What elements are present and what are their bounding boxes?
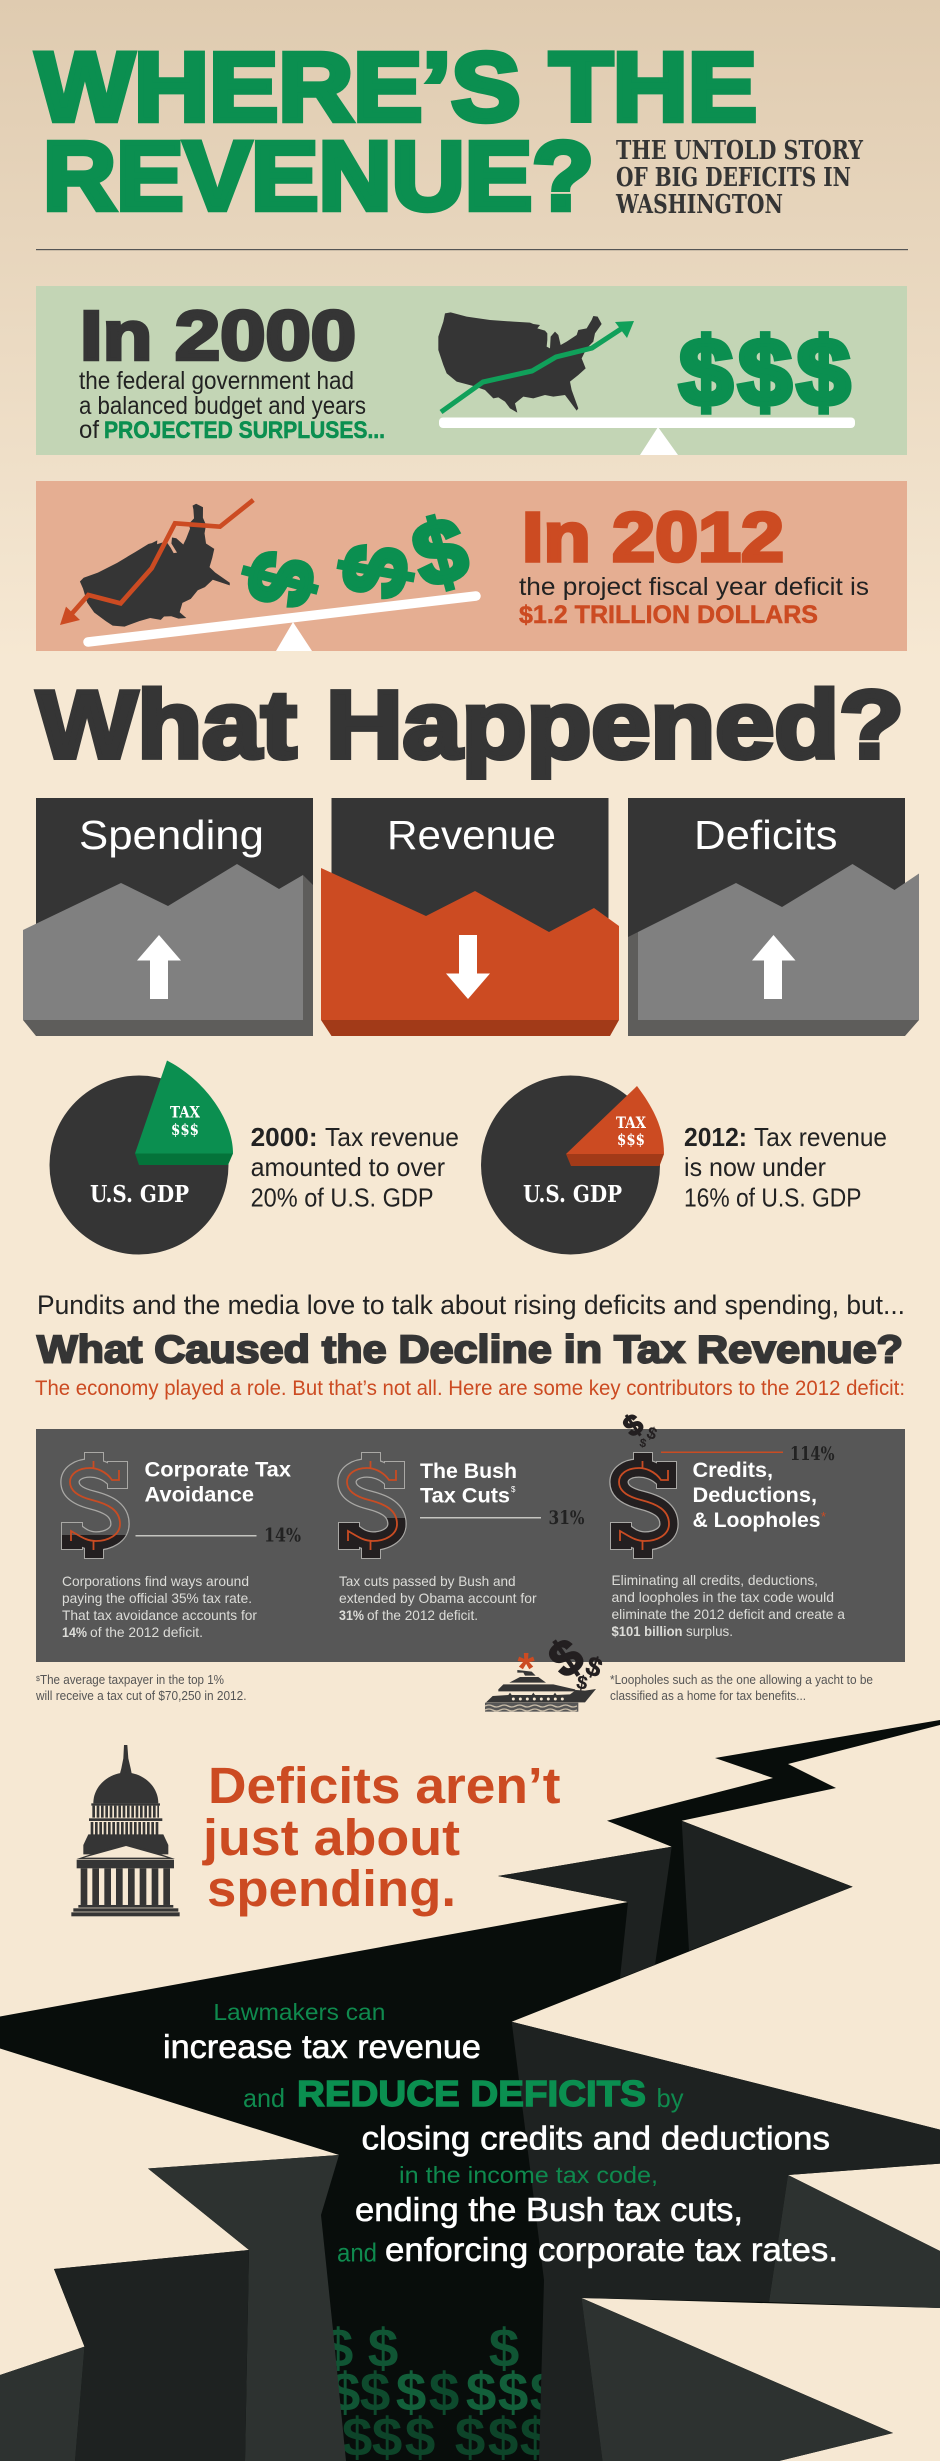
dollars in the crack: $ bbox=[498, 2361, 528, 2423]
panel: deficits bbox=[628, 798, 919, 1036]
column: credits deductions loopholes: 114% bbox=[790, 1443, 834, 1465]
dollar signs: $ bbox=[797, 319, 850, 426]
text: lawmakers call to action bbox=[163, 1999, 838, 2268]
icon: US map bbox=[438, 312, 602, 413]
column: corporate tax avoidance bbox=[61, 1452, 301, 1640]
text: 2000 tax revenue: Tax revenue bbox=[325, 1122, 459, 1152]
icon: dollar 14 percent bbox=[61, 1452, 128, 1559]
column: bush tax cuts: of the 2012 deficit. bbox=[367, 1607, 478, 1623]
icon: dollars from the yacht: $ bbox=[582, 1650, 606, 1684]
text: balanced budget bbox=[79, 367, 385, 444]
column: credits deductions loopholes bbox=[610, 1443, 845, 1639]
pie chart: 2012: TAX bbox=[616, 1113, 646, 1132]
icon: dollar 31 percent bbox=[338, 1452, 405, 1559]
icon: yacht bbox=[485, 1627, 606, 1712]
text: 2012 tax revenue: Tax revenue bbox=[754, 1122, 887, 1152]
column: credits deductions loopholes: eliminate the 2012 deficit and create a bbox=[612, 1606, 845, 1622]
text: balanced budget: of bbox=[79, 416, 99, 444]
heading: deficits aren't just about spending: spending. bbox=[207, 1860, 456, 1917]
dollar signs: $ bbox=[738, 319, 792, 426]
text: balanced budget: PROJECTED SURPLUSES... bbox=[104, 417, 385, 444]
footnote: yacht loophole bbox=[610, 1673, 873, 1703]
column: corporate tax avoidance: Corporations find ways around bbox=[62, 1573, 249, 1589]
column: bush tax cuts: extended by Obama account for bbox=[339, 1590, 537, 1606]
column: bush tax cuts bbox=[338, 1452, 584, 1623]
dollars in the crack bbox=[323, 2317, 560, 2461]
column: bush tax cuts: Tax Cuts bbox=[420, 1484, 510, 1508]
column: bush tax cuts: Tax cuts passed by Bush and bbox=[339, 1573, 516, 1589]
title: REVENUE? bbox=[43, 122, 594, 230]
balance beam bbox=[439, 418, 855, 455]
subtitle: THE UNTOLD STORY bbox=[616, 136, 863, 166]
dollars in the crack: $ bbox=[396, 2361, 426, 2423]
title: WHERE’S THE bbox=[36, 32, 757, 142]
subtitle: OF BIG DEFICITS IN bbox=[616, 163, 851, 193]
subheading: The economy played a role. But that’s not all. Here are some key contributors to the 2012 deficit: bbox=[35, 1376, 905, 1400]
text: 2012 tax revenue: is now under bbox=[684, 1152, 826, 1182]
dollars in the crack: $ bbox=[466, 2361, 496, 2423]
column: credits deductions loopholes: surplus. bbox=[686, 1623, 733, 1639]
panel: in 2012 bbox=[36, 481, 907, 659]
text: deficit bbox=[519, 573, 869, 629]
icon: capitol building bbox=[71, 1745, 180, 1916]
icon: dollars from the yacht: $ bbox=[575, 1672, 589, 1695]
pie chart: 2012 bbox=[481, 1076, 664, 1254]
text: lawmakers call to action: REDUCE DEFICITS bbox=[297, 2073, 646, 2114]
footnote: top one percent bbox=[35, 1673, 247, 1703]
pie chart: 2000 bbox=[50, 1060, 233, 1254]
column: corporate tax avoidance: of the 2012 deficit. bbox=[90, 1624, 203, 1640]
text: lawmakers call to action: increase tax revenue bbox=[163, 2028, 481, 2065]
column: bush tax cuts: 31% bbox=[548, 1507, 584, 1529]
icon: tipped US map bbox=[74, 498, 250, 659]
pie chart: 2012: U.S. GDP bbox=[523, 1181, 622, 1208]
tipped dollar signs: $ bbox=[225, 543, 335, 617]
heading: in 2012: In 2012 bbox=[522, 498, 784, 576]
column: corporate tax avoidance: paying the official 35% tax rate. bbox=[62, 1590, 252, 1606]
text: 2012 tax revenue: 16% of U.S. GDP bbox=[684, 1182, 862, 1212]
panel: revenue: Revenue bbox=[387, 812, 556, 858]
arrow: up bbox=[752, 935, 796, 999]
dollars in the crack: $ bbox=[530, 2361, 560, 2423]
column: bush tax cuts: $ bbox=[511, 1485, 516, 1494]
text: deficit: $1.2 TRILLION DOLLARS bbox=[519, 601, 818, 629]
text: lawmakers call to action: closing credits and deductions bbox=[362, 2120, 830, 2156]
icon: floating dollars above panel: $ bbox=[618, 1408, 649, 1444]
subtitle bbox=[615, 136, 863, 220]
text: balanced budget: a balanced budget and years bbox=[79, 392, 366, 420]
footnote: top one percent: The average taxpayer in the top 1% bbox=[40, 1673, 224, 1687]
footnote: yacht loophole: *Loopholes such as the one allowing a yacht to be bbox=[610, 1673, 873, 1687]
panel: spending: Spending bbox=[79, 812, 264, 858]
intro text: Pundits and the media love to talk about rising deficits and spending, but... bbox=[37, 1290, 905, 1320]
text: lawmakers call to action: and bbox=[243, 2083, 285, 2113]
text: 2012 tax revenue: 2012: bbox=[684, 1122, 747, 1152]
tipped dollar signs: $ bbox=[403, 498, 477, 608]
panel: spending bbox=[23, 798, 313, 1036]
heading: deficits aren't just about spending: Deficits aren’t bbox=[208, 1757, 561, 1814]
dollars in the crack: $ bbox=[489, 2317, 519, 2379]
arrow: down bbox=[446, 935, 490, 999]
pie chart: 2000: $$$ bbox=[171, 1120, 199, 1139]
column: corporate tax avoidance: Avoidance bbox=[144, 1483, 254, 1507]
heading: deficits aren't just about spending bbox=[202, 1757, 561, 1917]
column: corporate tax avoidance: That tax avoidance accounts for bbox=[62, 1607, 257, 1623]
text: balanced budget: the federal government had bbox=[79, 367, 354, 395]
icon: dollar 114 percent bbox=[610, 1452, 677, 1559]
text: deficit: the project fiscal year deficit is bbox=[519, 573, 869, 601]
heading: in 2000: In 2000 bbox=[80, 296, 356, 374]
pie chart: 2000: TAX bbox=[170, 1102, 200, 1122]
text: lawmakers call to action: enforcing corporate tax rates. bbox=[385, 2231, 838, 2268]
footnote: top one percent: $ bbox=[36, 1676, 40, 1683]
column: corporate tax avoidance: 14% bbox=[62, 1624, 87, 1640]
tipped dollar signs bbox=[225, 498, 477, 617]
arrow: rising green line bbox=[441, 321, 634, 412]
icon: red asterisk: * bbox=[517, 1644, 535, 1693]
panel: key contributors bbox=[36, 1429, 905, 1662]
text: 2012 tax revenue bbox=[684, 1122, 887, 1212]
text: lawmakers call to action: and bbox=[337, 2238, 377, 2268]
dollars in the crack: $ bbox=[429, 2361, 459, 2423]
dollars in the crack: $ bbox=[360, 2361, 390, 2423]
panel: deficits: Deficits bbox=[694, 812, 838, 858]
column: credits deductions loopholes: Deductions, bbox=[692, 1483, 817, 1507]
text: 2000 tax revenue: 2000: bbox=[251, 1122, 318, 1152]
footnote: top one percent: will receive a tax cut of $70,250 in 2012. bbox=[35, 1689, 247, 1703]
dollar signs: $ bbox=[679, 319, 733, 426]
dollars in the crack: $ bbox=[330, 2361, 360, 2423]
column: bush tax cuts: 31% bbox=[339, 1607, 364, 1623]
text: 2000 tax revenue: 20% of U.S. GDP bbox=[251, 1182, 434, 1212]
column: credits deductions loopholes: Credits, bbox=[692, 1458, 773, 1482]
panel: in 2000 bbox=[36, 286, 907, 455]
dollars in the crack: $ bbox=[323, 2317, 353, 2379]
footnote: yacht loophole: classified as a home for tax benefits... bbox=[610, 1689, 806, 1703]
text: 2000 tax revenue: amounted to over bbox=[251, 1152, 445, 1182]
text: lawmakers call to action: by bbox=[656, 2083, 684, 2113]
heading: what caused the decline: What Caused the Decline in Tax Revenue? bbox=[37, 1328, 903, 1372]
column: corporate tax avoidance: Corporate Tax bbox=[144, 1458, 291, 1482]
pie chart: 2012: $$$ bbox=[617, 1130, 645, 1149]
tipped dollar signs: $ bbox=[322, 538, 430, 605]
heading: what happened: What Happened? bbox=[37, 672, 904, 778]
text: lawmakers call to action: Lawmakers can bbox=[213, 1999, 385, 2025]
dollar signs bbox=[679, 319, 850, 426]
text: lawmakers call to action: ending the Bush tax cuts, bbox=[355, 2191, 743, 2228]
title bbox=[36, 32, 757, 230]
heading: deficits aren't just about spending: just about bbox=[202, 1809, 460, 1866]
column: corporate tax avoidance: 14% bbox=[264, 1525, 301, 1547]
column: credits deductions loopholes: * bbox=[821, 1509, 826, 1524]
icon: floating dollars above panel: $ bbox=[644, 1423, 660, 1444]
tilted beam bbox=[88, 596, 476, 651]
pie chart: 2000: U.S. GDP bbox=[90, 1181, 189, 1208]
column: credits deductions loopholes: Eliminating all credits, deductions, bbox=[612, 1572, 818, 1588]
icon: floating dollars above panel: $ bbox=[638, 1436, 648, 1451]
arrow: up bbox=[137, 935, 181, 999]
text: lawmakers call to action: in the income tax code, bbox=[399, 2162, 658, 2188]
icon: floating dollars above panel bbox=[618, 1408, 660, 1451]
panel: revenue bbox=[321, 798, 619, 1036]
dollars in the crack: $ bbox=[368, 2317, 398, 2379]
subtitle: WASHINGTON bbox=[615, 190, 783, 220]
column: credits deductions loopholes: $101 billion bbox=[612, 1623, 682, 1639]
illustration: ground crack bbox=[0, 1720, 940, 2461]
column: credits deductions loopholes: & Loopholes bbox=[692, 1508, 821, 1532]
column: bush tax cuts: The Bush bbox=[420, 1459, 517, 1483]
text: 2000 tax revenue bbox=[251, 1122, 459, 1212]
icon: dollars from the yacht: $ bbox=[539, 1627, 594, 1689]
arrow: falling red line bbox=[60, 500, 253, 625]
column: credits deductions loopholes: and loopholes in the tax code would bbox=[612, 1589, 834, 1605]
